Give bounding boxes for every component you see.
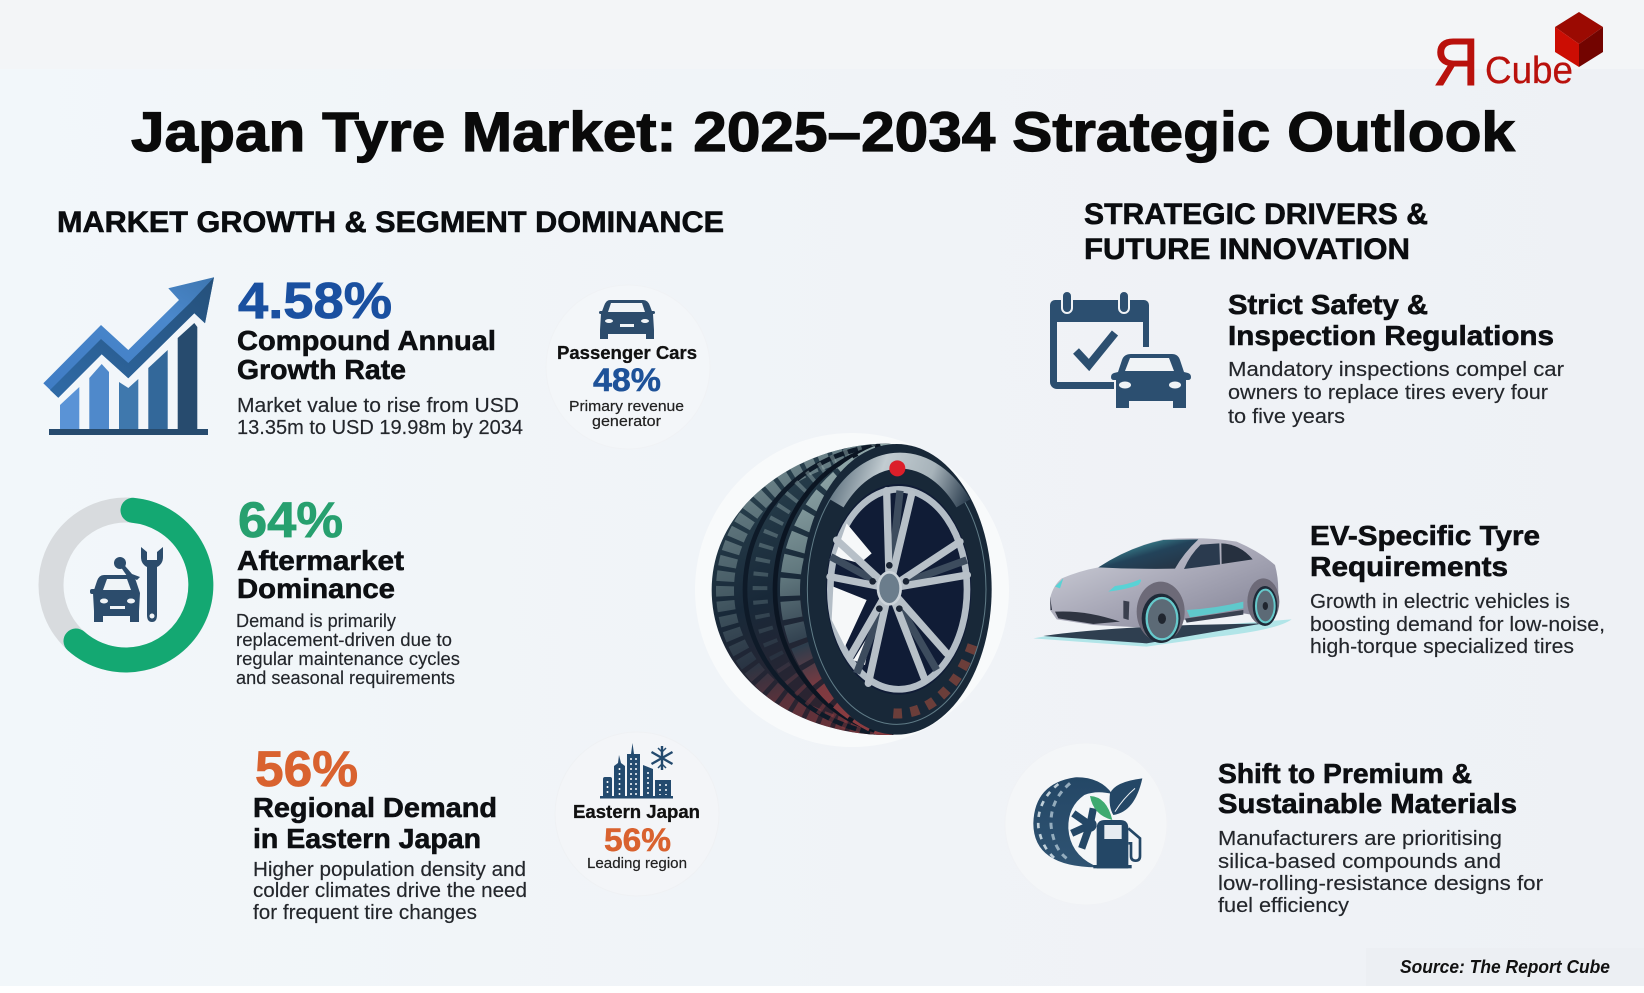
heading: EV-specific [1310, 520, 1540, 582]
label: eastern japan: Eastern Japan [573, 802, 700, 822]
heading: EV-specific: Requirements [1310, 551, 1508, 582]
heading: aftermarket dominance [237, 545, 404, 604]
heading: regional demand: Regional Demand [253, 792, 497, 823]
heading: aftermarket dominance: Dominance [237, 573, 395, 604]
panel: regional demand [253, 741, 527, 924]
source note: Source: The Report Cube [1400, 957, 1610, 977]
label: passenger cars: Passenger Cars [557, 343, 697, 363]
text: mandatory inspections: Mandatory inspections compel car [1228, 359, 1564, 381]
text: primary revenue generator [569, 398, 684, 430]
text: market value [237, 395, 523, 439]
text: population: for frequent tire changes [253, 902, 477, 924]
text: market value: Market value to rise from USD [237, 395, 519, 417]
text: growth in electric: high-torque specialized tires [1310, 636, 1574, 658]
icon: calendar and car [1050, 291, 1191, 408]
stat: 56%: 56% [255, 741, 358, 797]
logo: RCube [1433, 12, 1603, 100]
heading: strict safety: Strict Safety & [1228, 289, 1428, 320]
text: demand: regular maintenance cycles [236, 648, 460, 669]
tyre tread [712, 444, 900, 735]
heading: aftermarket dominance: Aftermarket [237, 545, 404, 576]
panel: CAGR [43, 272, 523, 439]
icon: car front [599, 300, 655, 339]
text: population: Higher population density and [253, 859, 526, 881]
text: primary revenue generator: Primary revenue [569, 398, 684, 415]
title: Japan Tyre Market: 2025–2034 Strategic Outlook [131, 100, 1516, 163]
stat: 56% small: 56% [604, 822, 671, 858]
heading: compound annual growth rate: Growth Rate [237, 354, 406, 385]
tyre sidewall [802, 444, 992, 735]
panel: aftermarket [51, 492, 460, 688]
chart: donut 64% [51, 510, 201, 660]
icon: growth chart [43, 277, 214, 435]
text: mandatory inspections: owners to replace tires every four [1228, 382, 1548, 404]
text: growth in electric [1310, 591, 1605, 658]
text: mandatory inspections [1228, 359, 1564, 428]
stat: 4.58%: 4.58% [238, 272, 392, 329]
heading: compound annual growth rate: Compound Annual [237, 325, 496, 356]
text: growth in electric: Growth in electric vehicles is [1310, 591, 1570, 613]
text: demand: replacement-driven due to [236, 629, 452, 650]
text: manufacturers: fuel efficiency [1218, 895, 1349, 917]
text: demand [236, 610, 460, 688]
heading: regional demand [253, 792, 497, 854]
heading: compound annual growth rate [237, 325, 496, 385]
text: demand: and seasonal requirements [236, 667, 455, 688]
stat: 64%: 64% [238, 492, 343, 548]
heading: strategic drivers [1084, 198, 1428, 266]
panel: passenger cars [546, 285, 710, 449]
text: manufacturers: low-rolling-resistance designs for [1218, 873, 1543, 895]
tyre illustration [712, 444, 1008, 736]
text: demand: Demand is primarily [236, 610, 397, 631]
text: manufacturers [1218, 828, 1543, 917]
heading: strategic drivers: FUTURE INNOVATION [1084, 233, 1410, 266]
logo: RCube: Cube [1485, 50, 1573, 92]
panel: eastern japan [555, 732, 719, 896]
icon: electric car [1033, 538, 1292, 647]
heading: market growth: MARKET GROWTH & SEGMENT DOMINANCE [57, 206, 724, 239]
heading: shift to premium [1218, 758, 1517, 819]
text: population: colder climates drive the need [253, 880, 527, 902]
icon: tyre leaf fuel [1033, 777, 1142, 868]
logo cube [1555, 12, 1603, 67]
text: manufacturers: silica-based compounds and [1218, 851, 1501, 873]
heading: strict safety: Inspection Regulations [1228, 320, 1554, 351]
heading: regional demand: in Eastern Japan [253, 823, 481, 854]
heading: shift to premium: Shift to Premium & [1218, 758, 1472, 789]
heading: shift to premium: Sustainable Materials [1218, 788, 1517, 819]
text: market value: 13.35m to USD 19.98m by 2034 [237, 417, 523, 439]
text: leading region: Leading region [587, 855, 687, 872]
stat: 48%: 48% [593, 362, 661, 398]
icon: city and snowflake [600, 743, 673, 798]
heading: strategic drivers: STRATEGIC DRIVERS & [1084, 198, 1428, 231]
text: growth in electric: boosting demand for low-noise, [1310, 614, 1605, 636]
panel: premium materials [1005, 743, 1543, 917]
rising sun mark [889, 460, 905, 476]
panel: safety regulations [1050, 289, 1564, 428]
icon badge circle [1005, 743, 1167, 905]
wheel rim [826, 484, 971, 695]
text: primary revenue generator: generator [592, 413, 661, 430]
heading: strict safety [1228, 289, 1554, 351]
text: mandatory inspections: to five years [1228, 406, 1345, 428]
logo wordmark: Я [1433, 25, 1479, 100]
icon: car and wrench [90, 547, 163, 622]
heading: EV-specific: EV-Specific Tyre [1310, 520, 1540, 551]
text: population [253, 859, 527, 924]
text: manufacturers: Manufacturers are prioritising [1218, 828, 1502, 850]
panel: EV tyre [1033, 520, 1605, 658]
